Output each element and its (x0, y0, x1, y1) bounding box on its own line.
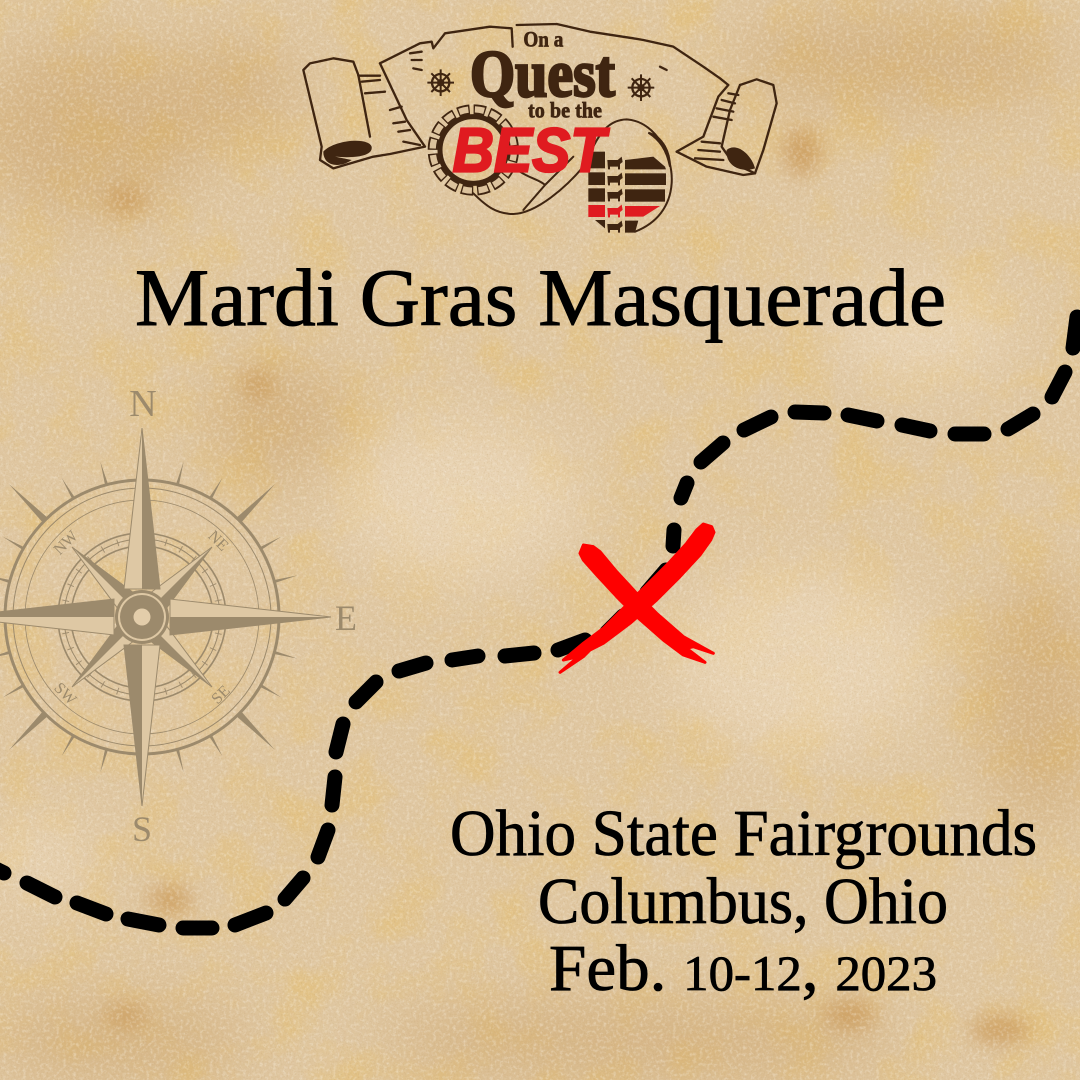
logo wording: to be the (528, 97, 602, 122)
compass direction letters (50, 383, 357, 849)
logo wording: BEST (453, 116, 610, 185)
diagonal compass points (64, 539, 220, 695)
logo scroll banner (303, 24, 777, 175)
compass direction letters: SW (50, 680, 80, 709)
dashed treasure trail (0, 317, 1077, 928)
title: Mardi Gras Masquerade (135, 252, 946, 343)
logo swoosh (473, 119, 672, 232)
logo gear (433, 109, 514, 191)
red X mark (560, 524, 714, 672)
compass direction letters: SE (208, 682, 234, 708)
logo wording: Quest (470, 38, 615, 111)
compass tick spikes (0, 461, 298, 773)
compass direction letters: S (132, 809, 152, 849)
logo Ohio cattle block (588, 152, 666, 233)
cardinal compass points (0, 428, 331, 806)
compass direction letters: E (335, 598, 357, 638)
compass direction letters: NW (51, 527, 82, 558)
city line: Columbus, Ohio (538, 865, 948, 938)
logo wording (453, 27, 615, 185)
date line: Feb. 10-12, 2023 (549, 932, 937, 1005)
event details (450, 797, 1037, 1005)
venue line: Ohio State Fairgrounds (450, 797, 1037, 870)
compass direction letters: N (129, 383, 157, 425)
compass rose (0, 383, 357, 849)
logo ship wheels (427, 69, 654, 101)
compass direction letters: NE (204, 528, 231, 555)
logo wording: On a (523, 27, 563, 52)
compass rings (5, 480, 279, 754)
logo scroll curls (323, 141, 755, 170)
compass hub (115, 590, 169, 644)
logo: On a Quest to be the Best (303, 24, 777, 233)
